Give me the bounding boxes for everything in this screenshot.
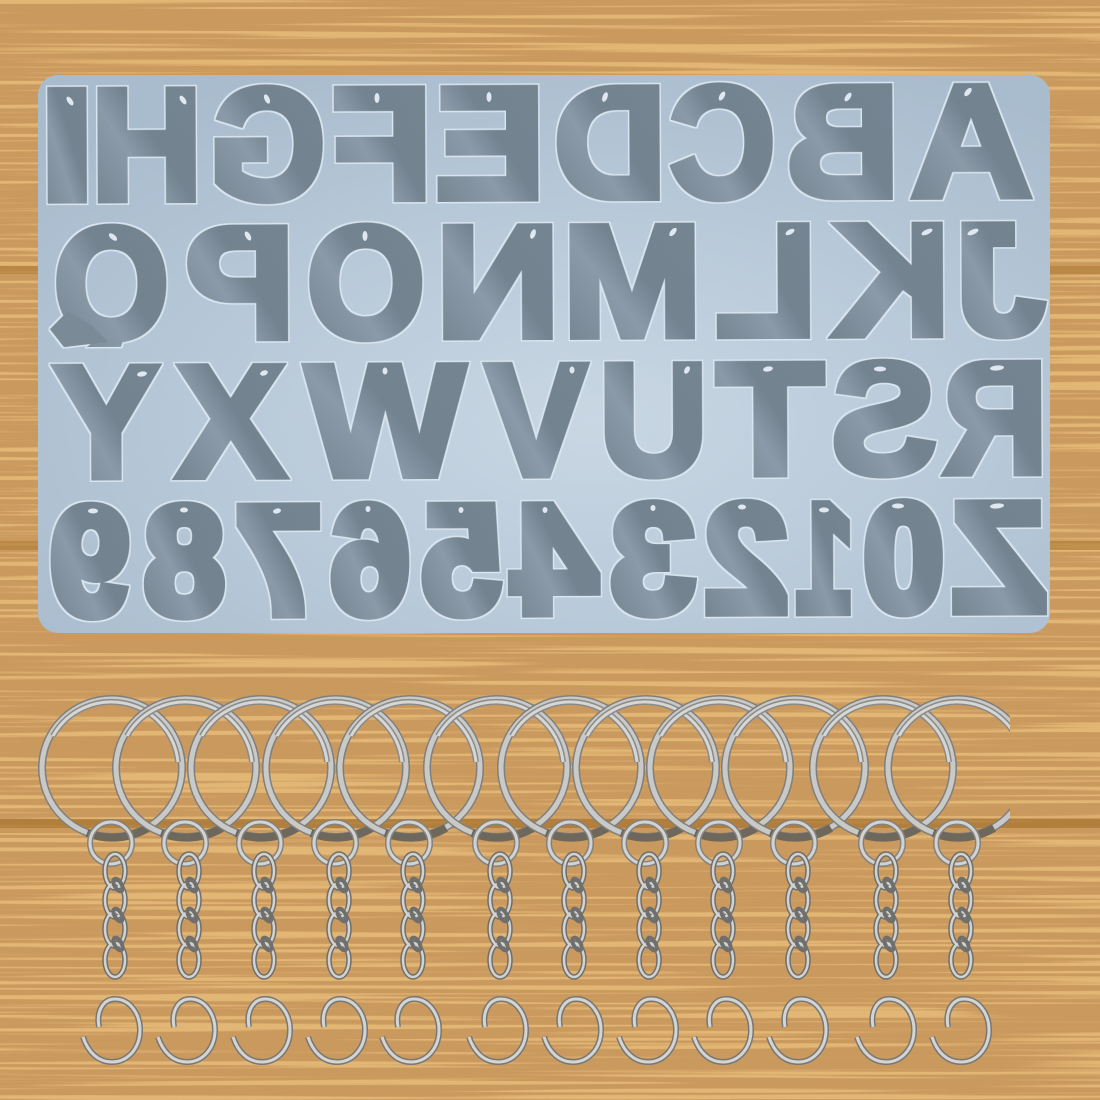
key ring 4 [266, 699, 406, 977]
row of mirrored letters J to Q: L [715, 193, 817, 369]
jump ring 11 [857, 999, 914, 1062]
key ring 12 [888, 699, 1028, 977]
keyring holes in letters [65, 87, 1004, 514]
row of mirrored Z and digits: 6 [330, 475, 410, 646]
row of mirrored letters A to I: B [786, 54, 899, 230]
row of mirrored letters R to Y: U [599, 332, 708, 508]
jump ring 5 [382, 999, 439, 1062]
row of mirrored Z and digits [50, 472, 1046, 647]
jump ring 8 [619, 999, 676, 1062]
row of mirrored Z and digits: 1 [796, 473, 854, 644]
row of mirrored Z and digits: Z [953, 472, 1046, 643]
row of mirrored letters A to I: H [91, 57, 202, 233]
row of mirrored letters J to Q: K [833, 192, 950, 369]
key ring 1 [42, 699, 182, 977]
key ring 7 [501, 699, 641, 977]
row of mirrored letters R to Y: V [486, 332, 587, 509]
row of mirrored letters J to Q: Q [53, 196, 169, 372]
row of mirrored letters A to I: I [39, 57, 95, 234]
row of mirrored Z and digits: 0 [863, 472, 944, 644]
key ring 5 [340, 699, 480, 977]
row of mirrored letters J to Q [48, 220, 1049, 349]
row of mirrored letters J to Q: N [435, 194, 560, 370]
row of mirrored letters A to I: F [332, 56, 432, 232]
row of mirrored letters J to Q: J [954, 192, 1045, 368]
row of mirrored letters R to Y: S [831, 331, 937, 507]
key ring 3 [191, 699, 331, 977]
jump ring 7 [544, 999, 601, 1062]
row of mirrored letters R to Y: R [943, 330, 1048, 507]
jump ring 1 [83, 999, 140, 1062]
key rings with chains [42, 699, 1028, 977]
jump ring 6 [469, 999, 526, 1062]
panel: silicone alphabet mold [38, 53, 1050, 647]
row of mirrored letters R to Y: X [177, 334, 285, 510]
row of mirrored Z and digits: 4 [512, 474, 598, 645]
row of mirrored letters J to Q: M [562, 193, 702, 370]
key ring 10 [725, 699, 865, 977]
jump ring 9 [694, 999, 751, 1062]
key ring 2 [116, 699, 256, 977]
row of mirrored Z and digits: 7 [235, 475, 322, 646]
jump ring 4 [308, 999, 365, 1062]
row of mirrored letters R to Y: Y [54, 334, 159, 511]
key ring 11 [813, 699, 953, 977]
row of mirrored letters A to I [39, 53, 1031, 234]
row of mirrored letters A to I: G [209, 56, 325, 233]
key ring 6 [427, 699, 567, 977]
row of mirrored letters A to I: A [911, 53, 1031, 230]
row of mirrored letters R to Y: W [306, 333, 465, 510]
row of mirrored letters R to Y: T [717, 331, 824, 508]
open jump rings [83, 999, 989, 1062]
row of mirrored Z and digits: 8 [144, 475, 225, 647]
jump ring 3 [233, 999, 290, 1062]
jump ring 10 [769, 999, 826, 1062]
key ring 9 [650, 699, 790, 977]
row of mirrored letters J to Q: P [185, 195, 295, 372]
letter cavities [39, 53, 1048, 647]
row of mirrored Z and digits: 3 [610, 473, 695, 645]
row of mirrored letters A to I: E [435, 56, 545, 232]
row of mirrored letters A to I: C [670, 55, 775, 231]
jump ring 12 [932, 999, 989, 1062]
row of mirrored letters J to Q: O [306, 195, 425, 371]
jump ring 2 [158, 999, 215, 1062]
row of mirrored Z and digits: 9 [50, 476, 130, 647]
row of mirrored letters A to I: D [554, 55, 666, 231]
row of mirrored Z and digits: 2 [704, 473, 788, 644]
key ring 8 [576, 699, 716, 977]
row of mirrored letters R to Y [54, 330, 1048, 511]
row of mirrored Z and digits: 5 [422, 474, 502, 646]
